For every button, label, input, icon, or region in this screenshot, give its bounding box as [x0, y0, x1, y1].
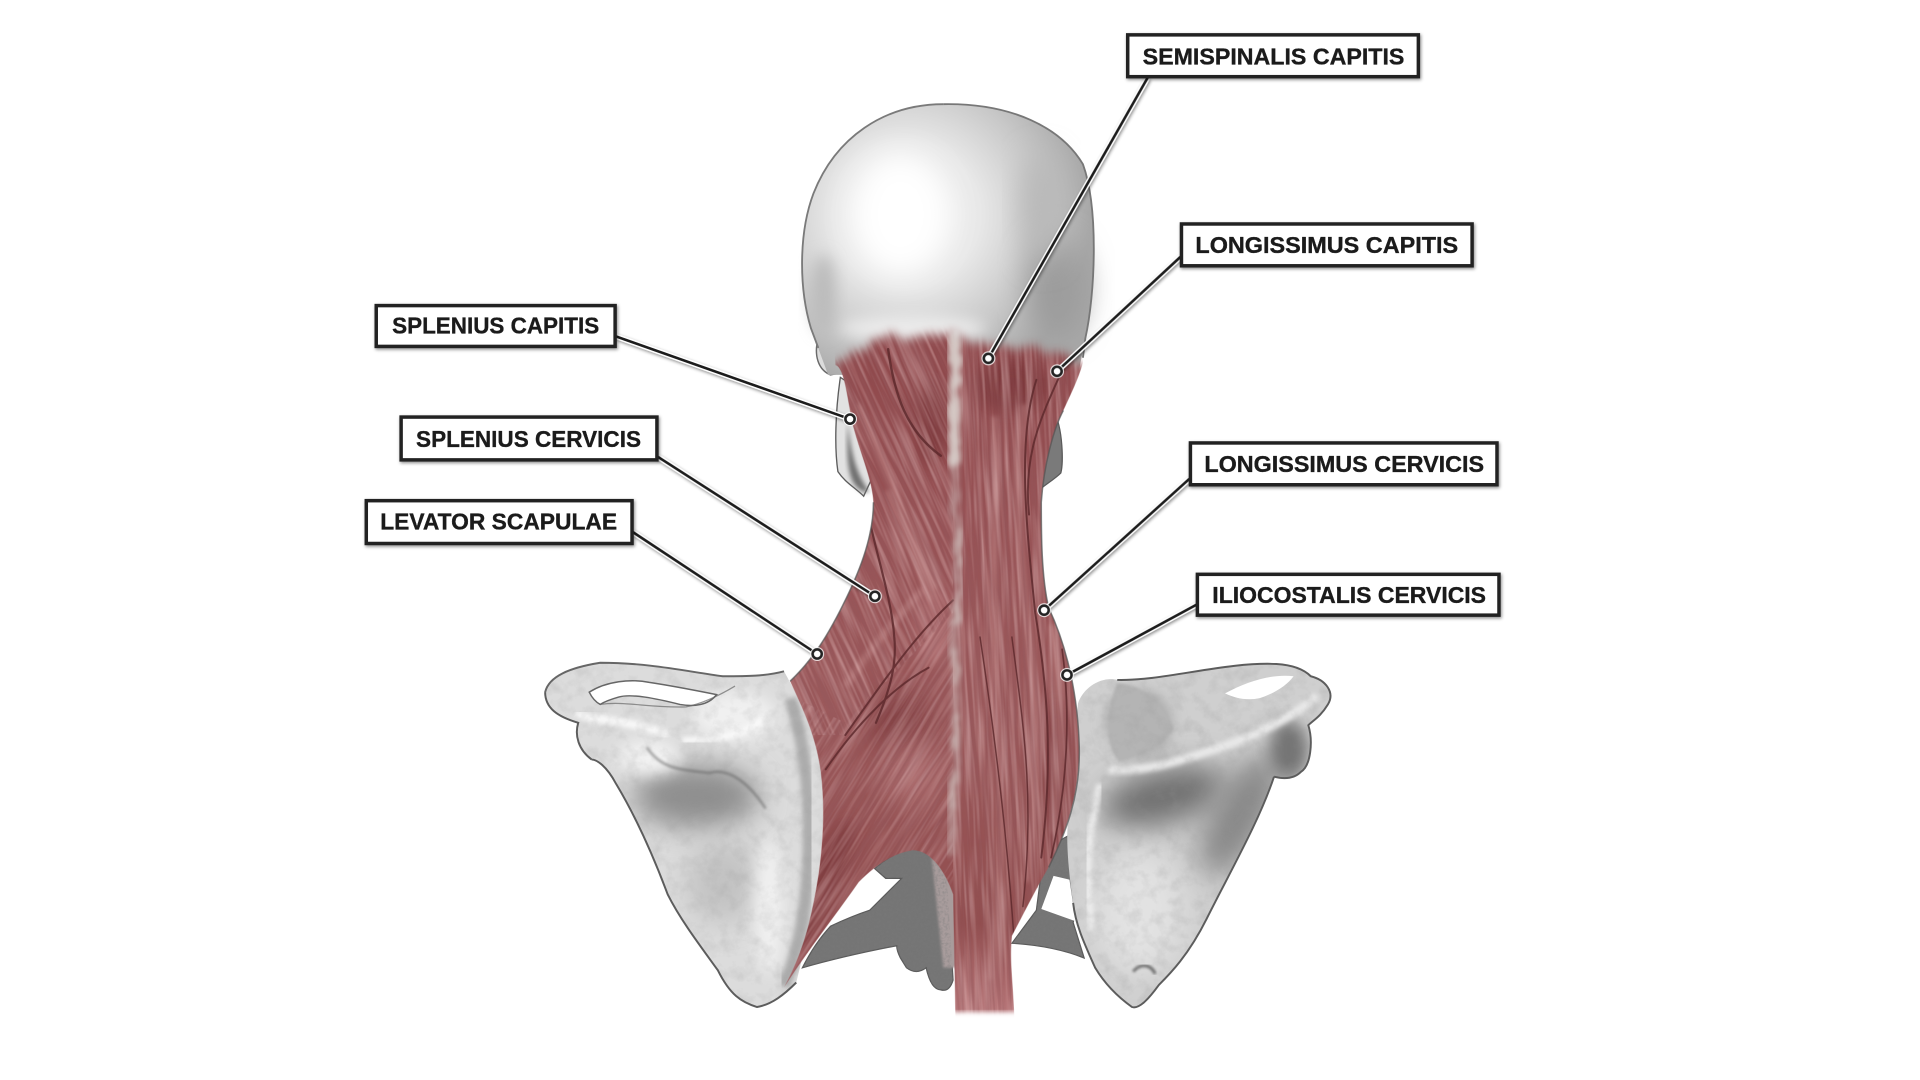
fibre highlights: rhomboid region	[789, 612, 953, 978]
fibre texture: splenius	[841, 343, 947, 676]
pale long strands	[845, 404, 1061, 980]
neck and back muscles	[784, 326, 1083, 1016]
fibre texture: rhomboid region	[788, 605, 952, 980]
dark shaded zones	[801, 359, 1066, 952]
right ear and mastoid	[1036, 410, 1062, 492]
fibre texture: erector strands	[955, 350, 1068, 1012]
label: splenius cervicis	[401, 417, 882, 603]
nuchal ligament midline	[951, 328, 959, 858]
muscle edge lines	[790, 410, 1079, 867]
left scapula and clavicle	[544, 662, 824, 1008]
label: semispinalis capitis: SEMISPINALIS CAPITIS	[1143, 44, 1404, 70]
ribs and vertebrae	[796, 833, 1090, 998]
label: iliocostalis cervicis	[1060, 574, 1499, 682]
label: splenius capitis	[376, 306, 857, 426]
label: longissimus capitis: LONGISSIMUS CAPITIS	[1195, 232, 1458, 258]
label: splenius capitis: SPLENIUS CAPITIS	[392, 312, 599, 338]
label: levator scapulae	[366, 501, 824, 661]
pale highlights on muscle	[888, 586, 951, 806]
skull	[802, 104, 1094, 375]
label: semispinalis capitis	[981, 35, 1418, 365]
label: longissimus cervicis	[1037, 443, 1497, 617]
left ear and mastoid	[816, 338, 872, 496]
label: levator scapulae: LEVATOR SCAPULAE	[380, 509, 617, 535]
right scapula and clavicle	[1066, 655, 1341, 1017]
label: splenius cervicis: SPLENIUS CERVICIS	[416, 426, 641, 452]
muscle base colour	[785, 326, 1083, 1016]
anatomical illustration	[539, 104, 1341, 1069]
fibre highlights: splenius	[790, 330, 953, 735]
fade at the end of the strap muscle	[946, 1012, 1024, 1029]
muscle separation lines	[826, 349, 1067, 943]
label: longissimus capitis	[1050, 224, 1472, 378]
fibre highlights: erector strands	[953, 334, 1080, 1013]
label: iliocostalis cervicis: ILIOCOSTALIS CERVICIS	[1212, 582, 1486, 608]
label: longissimus cervicis: LONGISSIMUS CERVICIS	[1204, 451, 1484, 477]
